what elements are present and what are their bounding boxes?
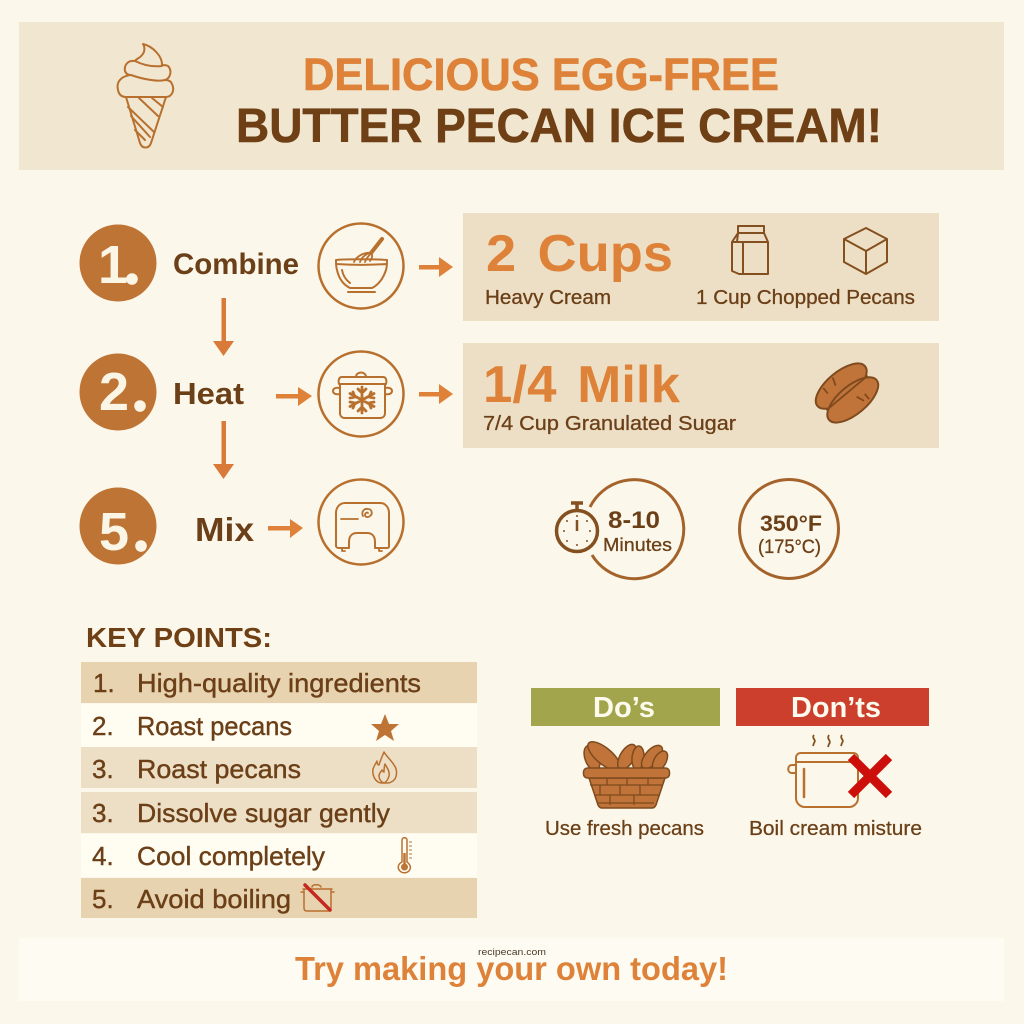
row 1: High-quality ingredients [137, 668, 421, 698]
ingredient: 7/4 Cup Granulated Sugar [483, 412, 736, 435]
step 2 label: Heat [173, 376, 244, 411]
panel: do's [531, 688, 720, 840]
icon: ice cream cone [118, 44, 173, 148]
row 2: Roast pecans [137, 711, 292, 741]
row 6: 5. [92, 884, 114, 914]
ingredient: Heavy Cream [485, 287, 611, 309]
do's heading [531, 688, 720, 726]
call to action: Try making your own today! [295, 950, 728, 987]
row 4 [81, 792, 477, 833]
amount: 1/4 Milk [483, 356, 680, 414]
step 2 badge: 2 [99, 362, 129, 422]
icon: ice cream machine [318, 480, 404, 564]
icon: milk carton [732, 226, 768, 274]
icon: star [371, 714, 399, 741]
panel: 2 cups heavy cream [463, 213, 939, 321]
don'ts heading: Don’ts [791, 692, 881, 724]
icon: thermometer [398, 838, 412, 873]
step 1 badge [80, 224, 156, 302]
row 6: Avoid boiling [137, 884, 291, 914]
row 2: 2. [92, 711, 114, 741]
arrow [276, 387, 312, 406]
row 4: 3. [92, 798, 114, 828]
do's caption: Use fresh pecans [545, 818, 704, 840]
icon: pecan [808, 355, 886, 431]
arrow down [213, 298, 234, 356]
panel: milk and sugar [463, 343, 939, 448]
duration: 8-10 [608, 507, 660, 534]
source url: recipecan.com [478, 947, 546, 958]
key points heading: KEY POINTS: [86, 622, 272, 653]
step 1 badge: 1 [98, 235, 128, 295]
step 1 badge: . [124, 235, 140, 295]
footer banner [19, 938, 1004, 1001]
row 1 [81, 662, 477, 703]
panel: don'ts [736, 688, 929, 840]
step 5 badge: . [134, 502, 149, 562]
step 5 badge: 5 [99, 502, 129, 562]
title line 1: DELICIOUS EGG-FREE [303, 49, 779, 100]
row 5: 4. [92, 841, 114, 871]
step 2 badge [80, 354, 156, 430]
time callout [556, 480, 684, 579]
row 3: Roast pecans [137, 754, 301, 784]
row 3 [81, 747, 477, 788]
temperature callout: (175°C) [758, 537, 821, 558]
do's heading: Do’s [593, 692, 655, 724]
row 2 [81, 704, 477, 747]
step 1 label: Combine [173, 248, 299, 281]
arrow [268, 519, 303, 538]
unit: Minutes [603, 535, 672, 555]
icon: flame [373, 752, 397, 783]
row 5: Cool completely [137, 841, 325, 871]
title line 2: BUTTER PECAN ICE CREAM! [236, 100, 882, 153]
step 5 label: Mix [195, 511, 255, 548]
arrow down [213, 421, 234, 479]
row 1: 1. [93, 668, 115, 698]
arrow [419, 257, 453, 277]
ingredient: 1 Cup Chopped Pecans [696, 287, 915, 309]
row 3: 3. [92, 754, 114, 784]
amount: 2 Cups [486, 225, 673, 283]
step 2 badge: . [132, 362, 148, 422]
icon: basket of pecans [581, 737, 671, 808]
icon: sugar cube [844, 228, 887, 274]
icon: no boiling pot [301, 885, 334, 911]
temperature callout [740, 480, 838, 578]
don'ts heading [736, 688, 929, 726]
icon: whisk and bowl [318, 224, 404, 308]
header banner [19, 22, 1004, 170]
icon: boiling pot with cross [788, 735, 889, 807]
step 5 badge [80, 488, 156, 564]
row 5 [81, 834, 477, 877]
arrow [419, 384, 453, 404]
don'ts caption: Boil cream misture [749, 818, 922, 840]
temperature callout: 350°F [760, 511, 822, 536]
row 4: Dissolve sugar gently [137, 798, 390, 828]
panel: key points list [81, 662, 477, 918]
row 6 [81, 878, 477, 918]
icon: pot with snowflake [318, 352, 404, 436]
icon: stopwatch [556, 503, 598, 552]
